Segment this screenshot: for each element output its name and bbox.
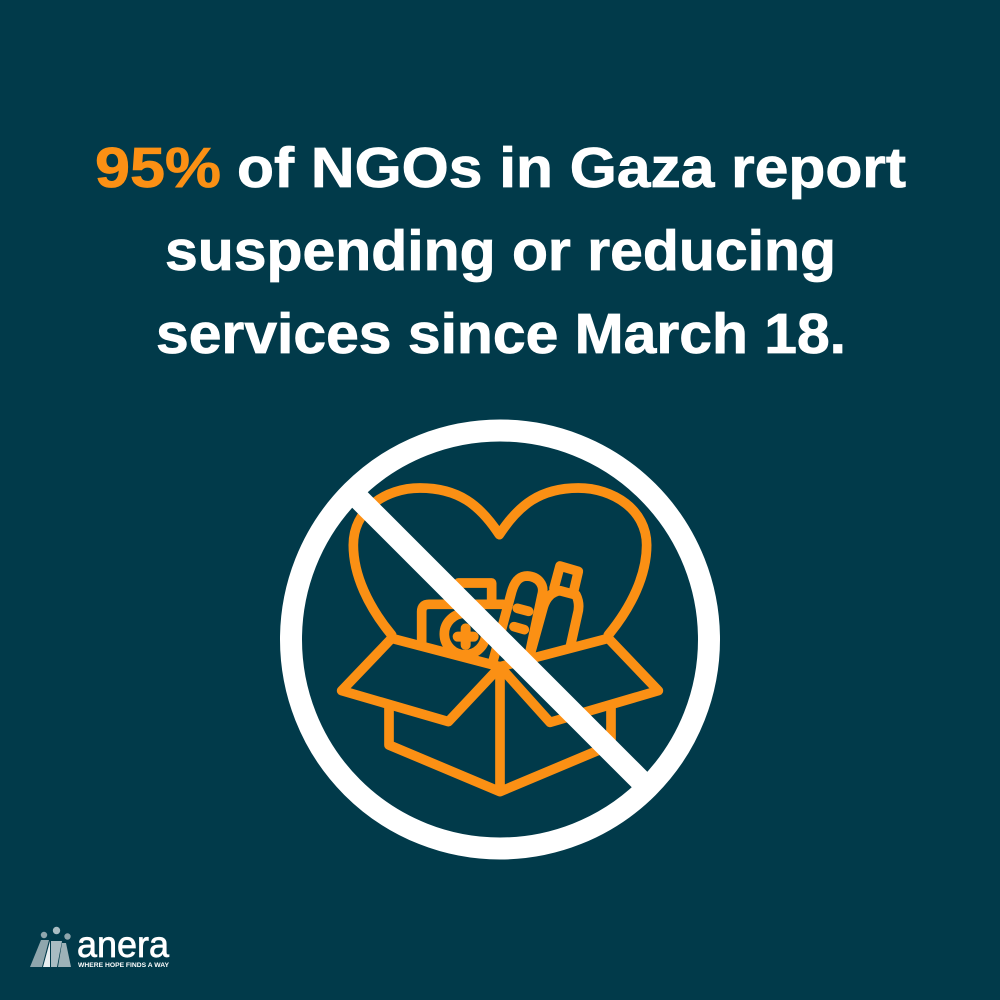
title: of NGOs in Gaza report bbox=[237, 136, 906, 200]
logo wordmark: anera bbox=[77, 924, 169, 965]
box lid flaps bbox=[342, 638, 658, 722]
icon: aid box with heart bbox=[342, 488, 658, 792]
first aid kit bbox=[422, 583, 503, 655]
title: suspending or reducing bbox=[165, 219, 836, 283]
logo mark: three figures bbox=[30, 927, 71, 967]
title: services since March 18. bbox=[156, 302, 846, 366]
bottle bbox=[530, 566, 579, 655]
title bbox=[95, 136, 906, 366]
icon: prohibited aid box bbox=[291, 430, 709, 848]
logo: anera bbox=[30, 924, 170, 969]
box body bbox=[389, 670, 611, 792]
baguette bbox=[493, 576, 543, 660]
prohibition sign bbox=[291, 430, 709, 848]
heart outline bbox=[353, 488, 647, 635]
highlighted statistic: 95% bbox=[95, 136, 221, 200]
logo tagline: WHERE HOPE FINDS A WAY bbox=[78, 962, 170, 969]
